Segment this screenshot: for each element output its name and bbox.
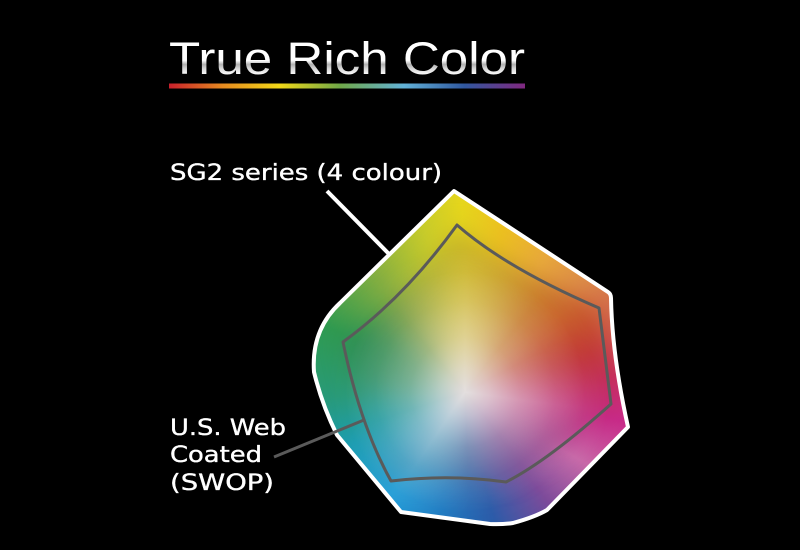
label: U.S. Web Coated (SWOP): (SWOP) (170, 471, 274, 496)
title: True Rich Color with rainbow rule: True Rich Color (169, 33, 525, 84)
label: SG2 series (4 colour): SG2 series (4 colour) (170, 161, 442, 186)
SG2 gamut outline (314, 191, 628, 524)
SG2 gamut colour fill (316, 194, 626, 522)
label: U.S. Web Coated (SWOP) (170, 416, 286, 496)
infographic page (169, 41, 630, 526)
label: U.S. Web Coated (SWOP): U.S. Web (170, 416, 286, 441)
SG2 leader line (327, 191, 389, 254)
label: U.S. Web Coated (SWOP): Coated (170, 443, 262, 468)
SWOP leader line (274, 420, 364, 457)
SWOP gamut outline (343, 225, 611, 482)
